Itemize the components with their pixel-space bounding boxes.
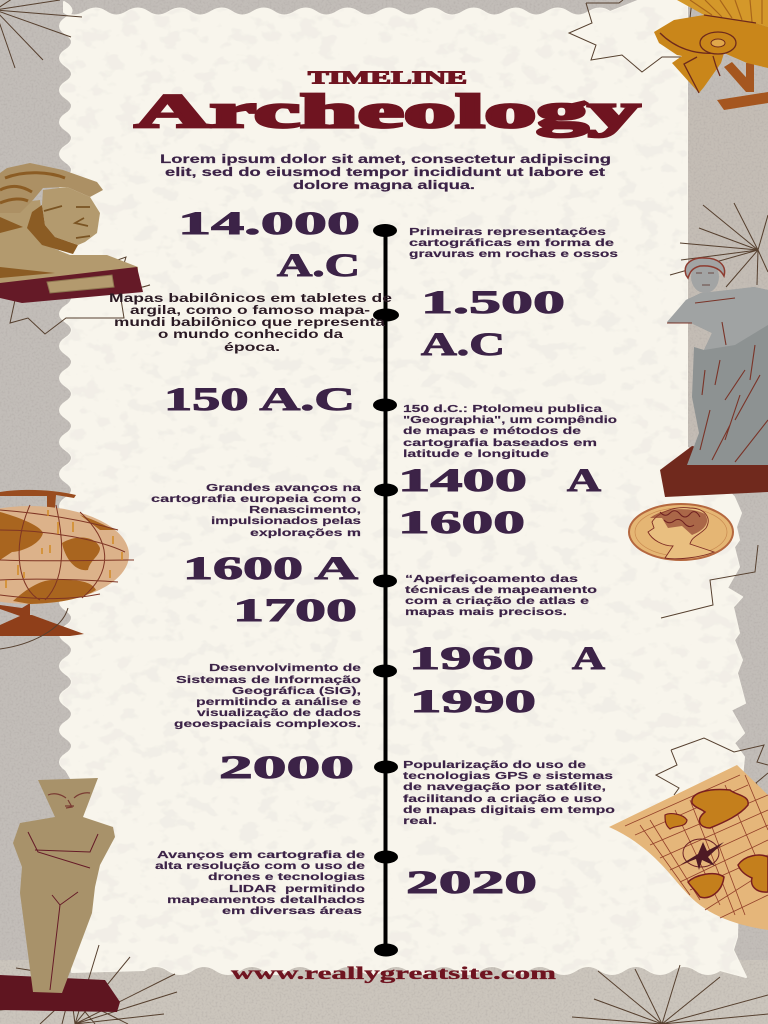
- date: 1960 A 1990: [409, 641, 605, 720]
- text: ptolomeu: cartografia baseados em: [403, 438, 597, 449]
- icon: world globe: [0, 490, 134, 636]
- icon: carved figure: [0, 778, 120, 1012]
- decorative star: behind map: [656, 738, 768, 795]
- date: 1600 A 1700: 1600 A: [183, 551, 358, 587]
- text: desenvolvimento SIG: Geográfica (SIG),: [232, 686, 361, 697]
- text: avancos em cartografia: drones e tecnologias: [208, 872, 365, 883]
- text: primeiras representacoes: gravuras em rochas e ossos: [409, 249, 618, 260]
- text: desenvolvimento SIG: [174, 663, 361, 730]
- text: primeiras representacoes: cartográficas em forma de: [409, 238, 614, 249]
- text: ptolomeu: 150 d.C.: Ptolomeu publica: [403, 404, 602, 415]
- text: mapas babilonicos: [109, 292, 393, 354]
- text: avancos em cartografia: Avanços em cartografia de: [157, 850, 365, 861]
- text: ptolomeu: "Geographia", um compêndio: [403, 415, 617, 426]
- text: primeiras representacoes: [409, 227, 618, 260]
- date: 1.500 A.C: [421, 285, 565, 363]
- footer website: www.reallygreatsite.com: [231, 963, 556, 983]
- decorative zigzag line: [661, 545, 758, 618]
- date: 150 A.C: 150 A.C: [164, 382, 355, 418]
- text: avancos em cartografia: LIDAR permitindo: [229, 884, 365, 895]
- text: avancos em cartografia: mapeamentos detalhados: [167, 895, 365, 906]
- text: mapas babilonicos: época.: [224, 341, 280, 354]
- date: 1400 A 1600: [398, 463, 601, 541]
- text: mapas babilonicos: argila, como o famoso mapa-: [130, 304, 370, 317]
- text: desenvolvimento SIG: visualização de dados: [197, 708, 361, 719]
- text: ptolomeu: latitude e longitude: [403, 449, 549, 460]
- text: grandes avancos: cartografia europeia com o: [151, 494, 361, 505]
- text: desenvolvimento SIG: geoespaciais complexos.: [174, 719, 361, 730]
- date: 1960 A 1990: 1960: [409, 641, 534, 677]
- icon: golden helmet: [654, 0, 768, 110]
- text: ptolomeu: [403, 404, 617, 460]
- date: 1960 A 1990: A: [572, 641, 605, 677]
- text: popularizacao GPS: Popularização do uso de: [403, 760, 586, 771]
- date: 14.000 A.C: A.C: [277, 248, 360, 284]
- date: 1400 A 1600: A: [567, 463, 601, 499]
- date: 14.000 A.C: 14.000: [178, 206, 360, 242]
- text: grandes avancos: impulsionados pelas: [211, 516, 361, 527]
- text: aperfeicoamento: mapas mais precisos.: [405, 607, 567, 618]
- date: 1.500 A.C: A.C: [421, 327, 505, 363]
- decorative curve: below globe: [0, 608, 68, 649]
- date: 1600 A 1700: 1700: [233, 593, 357, 629]
- text: aperfeicoamento: “Aperfeiçoamento das: [405, 574, 578, 585]
- decorative burst: right side: [670, 203, 768, 287]
- intro text: Lorem ipsum dolor sit amet, consectetur adipiscing: [160, 152, 611, 166]
- text: aperfeicoamento: [405, 574, 597, 618]
- text: desenvolvimento SIG: permitindo a análise e: [196, 697, 361, 708]
- icon: grey statue: [660, 258, 768, 497]
- decorative burst: top left: [0, 0, 82, 68]
- text: popularizacao GPS: de mapas digitais em tempo: [403, 805, 615, 816]
- decorative burst: bottom right: [572, 965, 768, 1024]
- text: grandes avancos: [151, 483, 361, 539]
- text: popularizacao GPS: real.: [403, 816, 437, 827]
- date: 1400 A 1600: 1400: [398, 463, 527, 499]
- text: desenvolvimento SIG: Sistemas de Informação: [176, 675, 361, 686]
- text: popularizacao GPS: [403, 760, 615, 827]
- text: popularizacao GPS: tecnologias GPS e sistemas: [403, 771, 613, 782]
- intro text: elit, sed do eiusmod tempor incididunt ut labore et: [165, 165, 605, 179]
- text: popularizacao GPS: facilitando a criação e uso: [403, 794, 602, 805]
- icon: antique coin: [629, 504, 733, 560]
- decorative burst: bottom left: [0, 945, 177, 1024]
- decorative star: top right: [569, 0, 692, 72]
- text: avancos em cartografia: em diversas áreas: [222, 906, 362, 917]
- text: popularizacao GPS: de navegação por satélite,: [403, 782, 606, 793]
- text: mapas babilonicos: Mapas babilônicos em tabletes de: [109, 292, 393, 305]
- text: ptolomeu: de mapas e métodos de: [403, 426, 581, 437]
- date: 1600 A 1700: [183, 551, 358, 629]
- icon: old map: [609, 765, 768, 930]
- text: aperfeicoamento: técnicas de mapeamento: [405, 585, 597, 596]
- date: 2020: 2020: [406, 865, 537, 901]
- timeline axis: [373, 224, 399, 956]
- text: aperfeicoamento: com a criação de atlas e: [405, 596, 589, 607]
- text: avancos em cartografia: [155, 850, 365, 917]
- date: 14.000 A.C: [178, 206, 360, 284]
- date: 2000: 2000: [219, 750, 354, 786]
- icon: classical bust: [0, 163, 143, 303]
- text: grandes avancos: explorações m: [250, 528, 361, 539]
- text: desenvolvimento SIG: Desenvolvimento de: [209, 663, 361, 674]
- intro text: [160, 152, 611, 192]
- text: avancos em cartografia: alta resolução com o uso de: [155, 861, 365, 872]
- date: 1.500 A.C: 1.500: [421, 285, 565, 321]
- text: grandes avancos: Renascimento,: [249, 505, 361, 516]
- text: mapas babilonicos: o mundo conhecido da: [158, 328, 344, 341]
- date: 1400 A 1600: 1600: [398, 505, 525, 541]
- text: mapas babilonicos: mundi babilônico que representa: [114, 316, 386, 329]
- title: archeology: Archeology: [135, 85, 640, 138]
- intro text: dolore magna aliqua.: [293, 178, 475, 192]
- decorative star: behind bust: [10, 257, 150, 334]
- title: timeline: TIMELINE: [308, 68, 467, 88]
- text: primeiras representacoes: Primeiras representações: [409, 227, 606, 238]
- text: grandes avancos: Grandes avanços na: [206, 483, 361, 494]
- date: 1960 A 1990: 1990: [410, 684, 536, 720]
